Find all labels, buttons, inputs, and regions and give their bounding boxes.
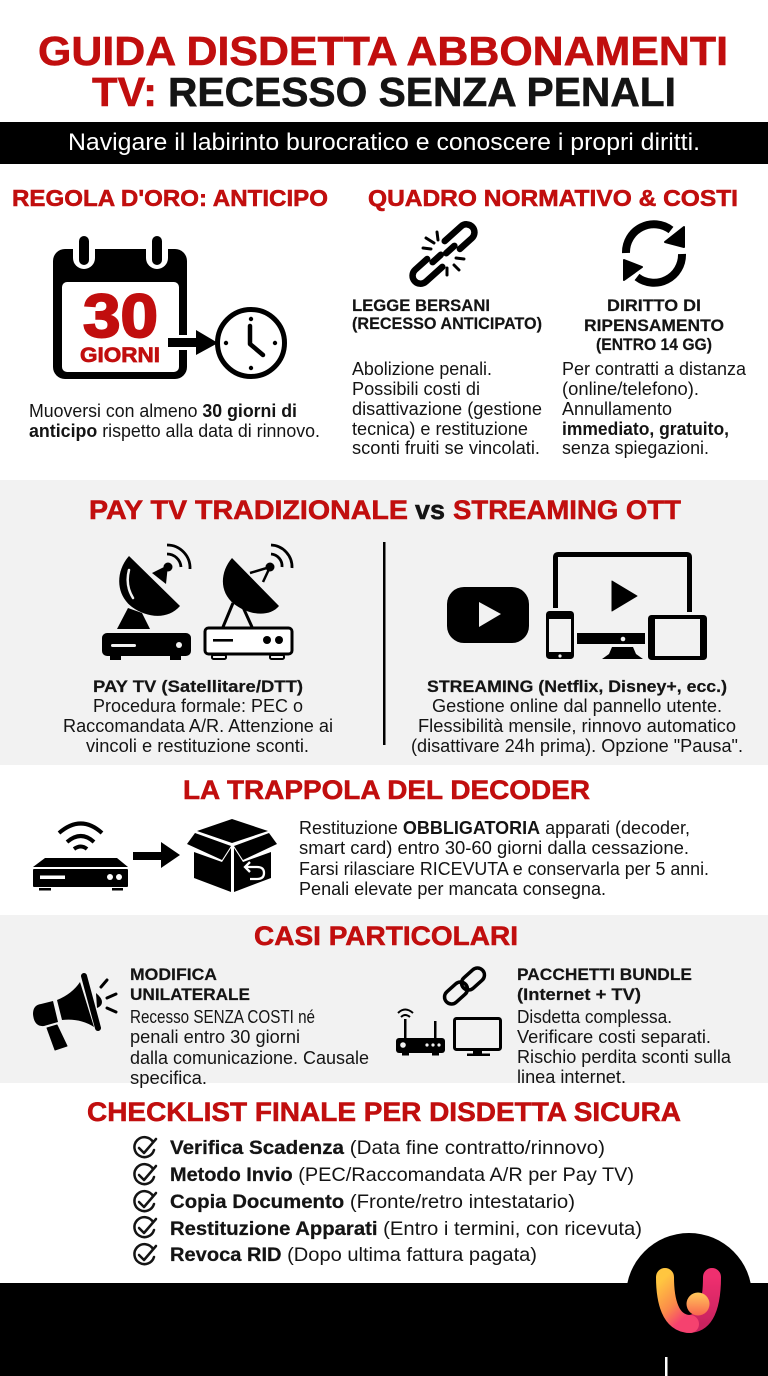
text: decoder: Penali elevate per mancata consegna. xyxy=(299,878,606,899)
text: pacchetti bundle xyxy=(517,965,732,1087)
text: modifica unilaterale: MODIFICA xyxy=(130,965,217,984)
title: TV: xyxy=(92,69,157,115)
text: legge bersani: Possibili costi di xyxy=(352,378,480,399)
text: legge bersani xyxy=(352,296,542,458)
text: diritto di ripensamento: (ENTRO 14 GG) xyxy=(596,335,712,354)
text: checklist items: Copia Documento (Fronte/retro intestatario) xyxy=(170,1191,575,1213)
text: checklist items xyxy=(170,1137,642,1266)
text: diritto di ripensamento: Annullamento xyxy=(562,398,672,419)
text: streaming: (disattivare 24h prima). Opzione "Pausa". xyxy=(411,735,743,756)
heading: trappola del decoder: LA TRAPPOLA DEL DECODER xyxy=(183,775,590,805)
text: modifica unilaterale: specifica. xyxy=(130,1067,207,1088)
text: modifica unilaterale xyxy=(130,965,369,1088)
text: diritto di ripensamento: senza spiegazioni. xyxy=(562,437,709,458)
heading: quadro normativo: QUADRO NORMATIVO & COSTI xyxy=(368,185,738,211)
heading: pay tv vs streaming xyxy=(89,495,682,525)
heading: pay tv vs streaming: vs xyxy=(415,495,445,525)
icon: return box xyxy=(187,819,277,892)
arrow: calendar to clock xyxy=(165,330,218,355)
text: diritto di ripensamento: DIRITTO DI xyxy=(607,296,701,315)
title: GUIDA DISDETTA ABBONAMENTI xyxy=(38,28,728,74)
icons: check marks xyxy=(134,1137,156,1264)
icon: megaphone xyxy=(33,976,116,1050)
text: legge bersani: Abolizione penali. xyxy=(352,358,492,379)
text: diritto di ripensamento: Per contratti a distanza xyxy=(562,358,747,379)
heading: checklist: CHECKLIST FINALE PER DISDETTA SICURA xyxy=(87,1097,681,1127)
text: pacchetti bundle: PACCHETTI BUNDLE xyxy=(517,965,692,984)
icon: calendar 30 giorni xyxy=(53,232,187,379)
text: streaming: Flessibilità mensile, rinnovo automatico xyxy=(418,715,736,736)
text: pay tv: PAY TV (Satellitare/DTT) xyxy=(93,677,303,696)
text: modifica unilaterale: Recesso SENZA COSTI né xyxy=(130,1006,315,1027)
text: checklist items: Verifica Scadenza (Data fine contratto/rinnovo) xyxy=(170,1137,605,1159)
icon: satellite decoder outline xyxy=(205,545,292,659)
text: pay tv: Raccomandata A/R. Attenzione ai xyxy=(63,715,333,736)
panel: pay tv vs streaming xyxy=(0,480,768,765)
text: pacchetti bundle: Verificare costi separati. xyxy=(517,1026,711,1047)
text: diritto di ripensamento: (online/telefono). xyxy=(562,378,699,399)
text: decoder: Restituzione OBBLIGATORIA apparati (decoder, xyxy=(299,817,690,838)
icon: play button xyxy=(447,587,529,643)
text: pacchetti bundle: Disdetta complessa. xyxy=(517,1006,672,1027)
title: RECESSO SENZA PENALI xyxy=(168,69,676,115)
icon: clock xyxy=(218,310,284,376)
icon: refresh arrows xyxy=(624,224,684,283)
text: legge bersani: LEGGE BERSANI xyxy=(352,296,490,315)
heading: regola d'oro: REGOLA D'ORO: ANTICIPO xyxy=(12,185,328,211)
footer band xyxy=(0,1233,768,1376)
text: decoder: smart card) entro 30-60 giorni dalla cessazione. xyxy=(299,837,689,858)
text: pay tv: Procedura formale: PEC o xyxy=(93,695,303,716)
panel: checklist xyxy=(0,1083,768,1283)
text: pacchetti bundle: Rischio perdita sconti sulla xyxy=(517,1046,732,1067)
text: pay tv: vincoli e restituzione sconti. xyxy=(86,735,309,756)
subtitle band xyxy=(0,122,768,164)
text: modifica unilaterale: penali entro 30 giorni xyxy=(130,1026,300,1047)
icon: calendar 30 giorni: 30 xyxy=(83,282,158,350)
panel: regola d'oro xyxy=(12,185,328,441)
text: checklist items: Metodo Invio (PEC/Raccomandata A/R per Pay TV) xyxy=(170,1164,634,1186)
text: anticipo: Muoversi con almeno 30 giorni di xyxy=(29,400,297,421)
icon: wifi decoder xyxy=(33,824,128,890)
text: legge bersani: sconti fruiti se vincolati. xyxy=(352,437,540,458)
icon: logo xyxy=(665,1277,712,1324)
text: streaming xyxy=(411,677,743,756)
heading: casi particolari: CASI PARTICOLARI xyxy=(254,921,518,951)
text: streaming: Gestione online dal pannello utente. xyxy=(432,695,722,716)
panel: quadro normativo xyxy=(352,185,747,458)
text: checklist items: Revoca RID (Dopo ultima fattura pagata) xyxy=(170,1244,537,1266)
panel: casi particolari xyxy=(0,915,768,1088)
text: legge bersani: disattivazione (gestione xyxy=(352,398,542,419)
subtitle band: Navigare il labirinto burocratico e conoscere i propri diritti. xyxy=(68,129,700,156)
icon: calendar 30 giorni: GIORNI xyxy=(80,344,160,367)
text: streaming: STREAMING (Netflix, Disney+, ecc.) xyxy=(427,677,727,696)
text: diritto di ripensamento xyxy=(562,296,747,458)
text: checklist items: Restituzione Apparati (Entro i termini, con ricevuta) xyxy=(170,1218,642,1240)
text: modifica unilaterale: dalla comunicazione. Causale xyxy=(130,1047,369,1068)
text: modifica unilaterale: UNILATERALE xyxy=(130,985,250,1004)
text: legge bersani: (RECESSO ANTICIPATO) xyxy=(352,314,542,333)
title xyxy=(38,28,728,115)
text: decoder: Farsi rilasciare RICEVUTA e conservarla per 5 anni. xyxy=(299,858,709,879)
text: pacchetti bundle: linea internet. xyxy=(517,1066,626,1087)
text: legge bersani: tecnica) e restituzione xyxy=(352,418,528,439)
text: diritto di ripensamento: immediato, gratuito, xyxy=(562,418,729,439)
heading: pay tv vs streaming: STREAMING OTT xyxy=(453,495,682,525)
arrow: decoder to box xyxy=(133,842,180,868)
text: diritto di ripensamento: RIPENSAMENTO xyxy=(584,316,724,335)
panel: trappola del decoder xyxy=(33,775,709,899)
heading: pay tv vs streaming: PAY TV TRADIZIONALE xyxy=(89,495,408,525)
icon: satellite decoder black xyxy=(102,545,191,660)
text: pay tv xyxy=(63,677,333,756)
text: decoder xyxy=(299,817,709,899)
icon: bundle router tv chain xyxy=(396,965,500,1056)
text: pacchetti bundle: (Internet + TV) xyxy=(517,985,641,1004)
icon: broken chain xyxy=(409,221,478,287)
panel: regola d'oro: anticipo rispetto alla data di rinnovo. xyxy=(29,420,320,441)
icon: streaming devices xyxy=(546,554,707,660)
